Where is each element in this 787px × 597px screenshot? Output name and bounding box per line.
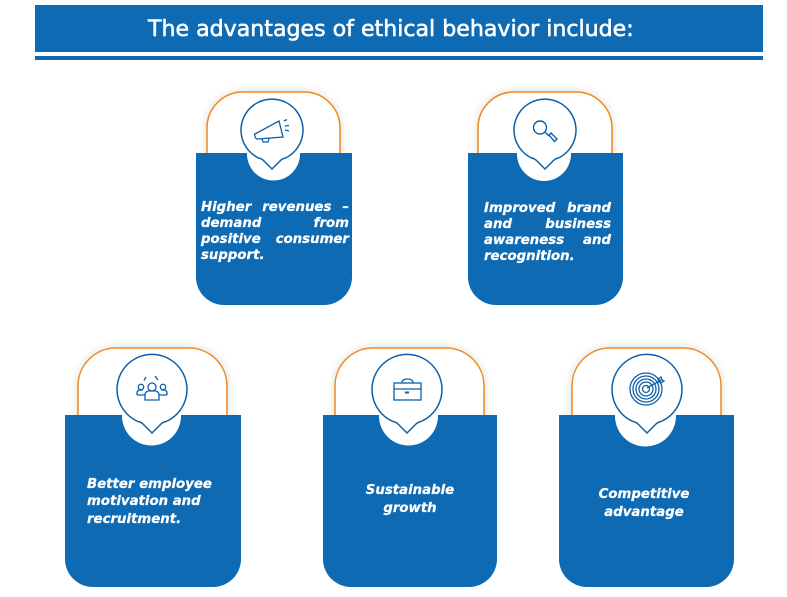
card: competitive advantage bbox=[559, 348, 734, 587]
text: higher revenues: demand from bbox=[201, 216, 349, 231]
icon: megaphone bbox=[254, 120, 289, 142]
text: higher revenues: Higher revenues – bbox=[201, 200, 349, 215]
text: better employee motivation bbox=[87, 476, 212, 526]
icon: briefcase bbox=[394, 379, 421, 400]
text: competitive advantage: advantage bbox=[604, 505, 684, 520]
card: sustainable growth bbox=[323, 348, 497, 587]
card: improved brand bbox=[468, 92, 623, 305]
text: improved brand: and business bbox=[484, 217, 611, 232]
card: higher revenues bbox=[196, 92, 352, 305]
title bar bbox=[35, 5, 763, 52]
icon: magnifier bbox=[534, 121, 557, 142]
icon: people group bbox=[137, 376, 167, 400]
text: sustainable growth bbox=[366, 483, 454, 516]
title: The advantages of ethical behavior include: bbox=[148, 16, 634, 42]
text: better employee motivation: Better employee bbox=[87, 476, 212, 492]
text: sustainable growth: Sustainable bbox=[366, 483, 454, 498]
text: higher revenues: support. bbox=[201, 248, 265, 263]
icon: target bbox=[630, 373, 664, 405]
text: sustainable growth: growth bbox=[383, 501, 437, 516]
text: improved brand bbox=[484, 201, 612, 264]
text: higher revenues: positive consumer bbox=[201, 232, 349, 247]
text: higher revenues bbox=[200, 200, 350, 263]
text: competitive advantage: Competitive bbox=[599, 487, 689, 502]
text: better employee motivation: motivation and bbox=[87, 494, 201, 509]
text: improved brand: awareness and bbox=[484, 233, 611, 248]
text: competitive advantage bbox=[599, 487, 689, 520]
text: better employee motivation: recruitment. bbox=[87, 512, 181, 526]
text: improved brand: recognition. bbox=[484, 249, 575, 264]
text: improved brand: Improved brand bbox=[484, 201, 611, 216]
card: better employee motivation bbox=[65, 348, 241, 587]
